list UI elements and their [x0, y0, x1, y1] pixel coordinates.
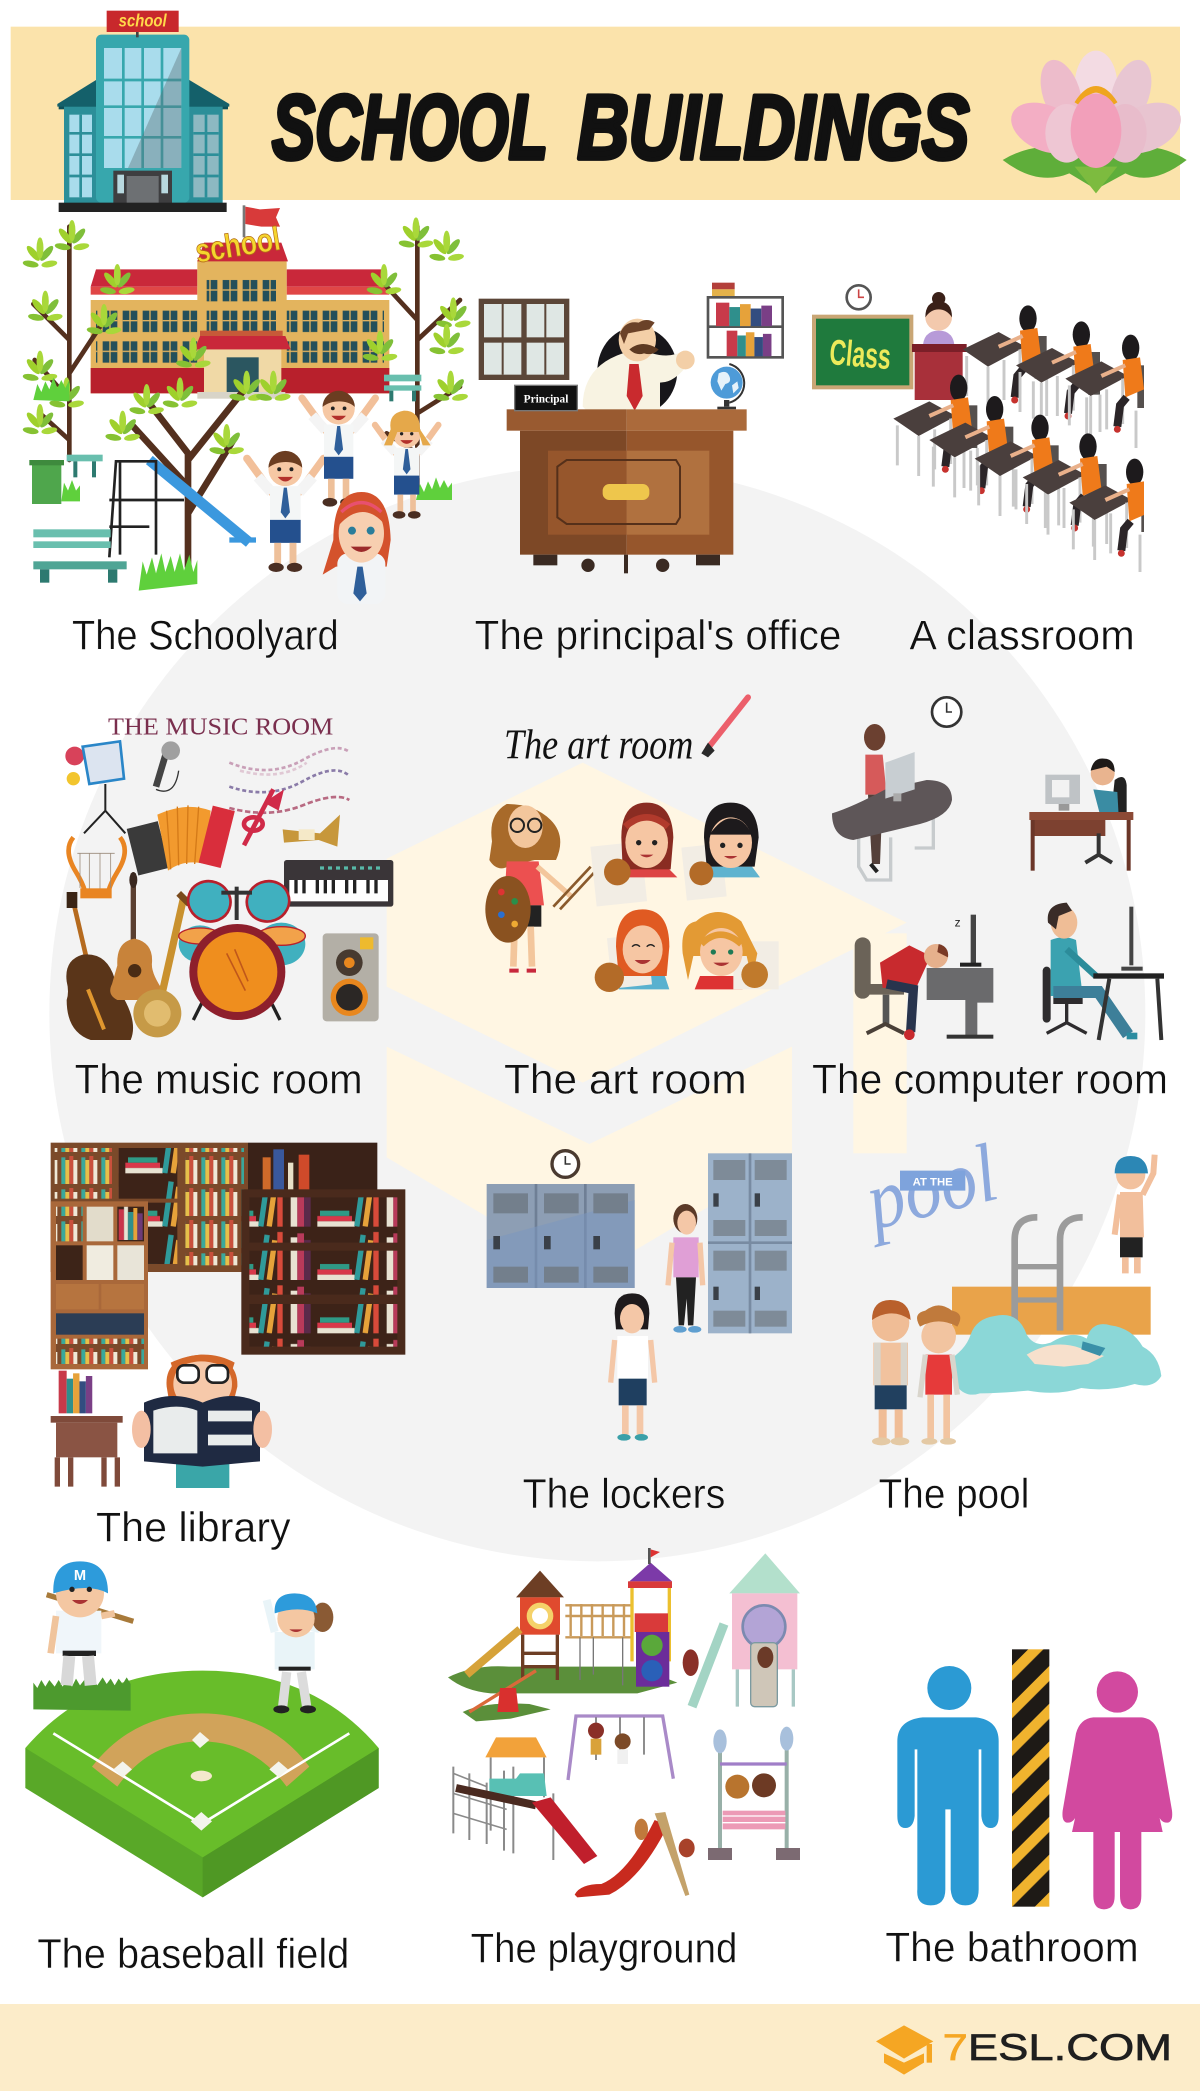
blackboard	[812, 315, 913, 389]
icon: woman	[1062, 1671, 1172, 1909]
label: playground: The playground	[471, 1926, 737, 1972]
sleeping student: z	[955, 916, 961, 930]
icon: man	[897, 1666, 999, 1905]
accordion	[127, 805, 235, 875]
swing bench	[708, 1727, 800, 1860]
panel: bathroom	[897, 1649, 1172, 1909]
title: BUILDINGS	[577, 78, 969, 179]
panel: schoolyard	[22, 205, 471, 604]
child painter 3	[595, 909, 669, 992]
art heading: The art room	[504, 722, 693, 769]
background circle	[49, 465, 1145, 1561]
art teacher	[485, 804, 595, 971]
icon: school building: school	[119, 11, 168, 31]
school building: school	[193, 221, 283, 271]
label: classroom: A classroom	[909, 612, 1135, 658]
label: library: The library	[96, 1504, 291, 1550]
batter: M	[74, 1568, 86, 1584]
label: art room: The art room	[504, 1056, 747, 1102]
swing	[568, 1716, 673, 1780]
ladder	[1015, 1217, 1083, 1331]
icon: school building	[57, 11, 229, 212]
man at desk	[1029, 759, 1133, 871]
label: music room: The music room	[75, 1056, 363, 1102]
principal	[583, 319, 695, 417]
side table	[51, 1371, 123, 1487]
icon: lotus	[1003, 51, 1189, 193]
panel: pool	[852, 1126, 1161, 1445]
field	[25, 1671, 379, 1897]
benches and bin	[29, 375, 421, 583]
water	[947, 1315, 1161, 1395]
two kids	[872, 1300, 960, 1445]
speaker	[323, 933, 379, 1021]
music notes	[229, 748, 349, 813]
right lockers	[708, 1153, 792, 1333]
left lockers	[487, 1184, 635, 1288]
label: schoolyard: The Schoolyard	[72, 612, 339, 658]
pool heading: pool	[852, 1126, 1006, 1248]
back bookcases	[51, 1143, 377, 1272]
violin	[66, 892, 133, 1040]
pool deck	[952, 1287, 1151, 1335]
child painter 1	[590, 803, 677, 906]
grass	[33, 377, 452, 591]
trees	[33, 227, 460, 567]
banjo	[133, 893, 189, 1037]
window	[479, 299, 569, 380]
tree leaves	[22, 217, 471, 455]
trumpet	[244, 789, 273, 845]
microphone	[156, 741, 180, 791]
panel: art room	[485, 697, 779, 992]
play tower	[467, 1548, 672, 1687]
panel: lockers	[487, 1151, 792, 1441]
bookshelf	[708, 283, 783, 357]
nameplate	[515, 385, 577, 411]
note stand	[65, 741, 125, 833]
students and desks	[893, 305, 1153, 572]
nameplate: Principal	[524, 394, 568, 406]
caution stripe	[1012, 1649, 1049, 1907]
header banner	[11, 27, 1180, 200]
teacher	[912, 292, 967, 400]
desk	[507, 409, 747, 573]
panel: classroom	[812, 285, 1153, 572]
pool heading: AT THE	[913, 1176, 953, 1188]
girl	[323, 492, 391, 604]
reading boy	[132, 1355, 272, 1488]
panel: principal's office	[479, 283, 783, 573]
student typing	[1043, 903, 1164, 1040]
clock	[932, 697, 961, 727]
watermark logo	[387, 763, 907, 1277]
music heading: THE MUSIC ROOM	[108, 714, 333, 741]
horn	[283, 815, 340, 847]
footer band	[0, 2004, 1200, 2091]
seesaw	[469, 1671, 536, 1712]
green ground	[448, 1666, 677, 1721]
blackboard: Class	[828, 331, 893, 377]
footer logo: 7ESL.COM	[943, 2026, 1172, 2068]
catcher	[267, 1593, 333, 1713]
standing girl	[668, 1204, 703, 1333]
guitar	[110, 872, 164, 1000]
label: bathroom: The bathroom	[885, 1924, 1139, 1970]
children	[247, 391, 438, 572]
label: lockers: The lockers	[523, 1471, 725, 1517]
panel: baseball field	[25, 1561, 379, 1897]
panel: computer room	[832, 697, 1164, 1040]
title	[272, 78, 969, 179]
child painter 2	[681, 803, 760, 901]
woman at desk	[832, 724, 952, 880]
label: principal's office: The principal's office	[475, 612, 841, 658]
pink tower slide	[683, 1553, 800, 1707]
keyboard	[284, 860, 393, 907]
red slides	[532, 1797, 695, 1897]
clock	[552, 1151, 579, 1177]
clock	[847, 285, 871, 309]
panel: music room	[65, 714, 393, 1040]
front girl	[611, 1293, 655, 1441]
climbing frame	[453, 1737, 553, 1860]
globe	[711, 364, 744, 409]
batter	[47, 1561, 133, 1685]
sleeping student	[855, 915, 993, 1040]
slide and climbing frame	[109, 460, 256, 557]
front bookcase	[241, 1189, 405, 1355]
child painter 4	[682, 912, 779, 989]
boy swimmer	[1115, 1155, 1155, 1273]
grass patch	[33, 1677, 131, 1711]
panel: playground	[448, 1548, 800, 1897]
drum kit	[179, 875, 305, 1020]
title: SCHOOL	[272, 78, 548, 179]
footer logo	[876, 2025, 1172, 2075]
lyre	[69, 837, 125, 896]
label: computer room: The computer room	[812, 1056, 1168, 1102]
label: baseball field: The baseball field	[37, 1931, 349, 1977]
panel: library	[51, 1143, 405, 1488]
label: pool: The pool	[879, 1471, 1029, 1517]
school building	[91, 205, 389, 399]
left bookcase	[51, 1201, 148, 1369]
icon: paint brush	[701, 697, 748, 757]
